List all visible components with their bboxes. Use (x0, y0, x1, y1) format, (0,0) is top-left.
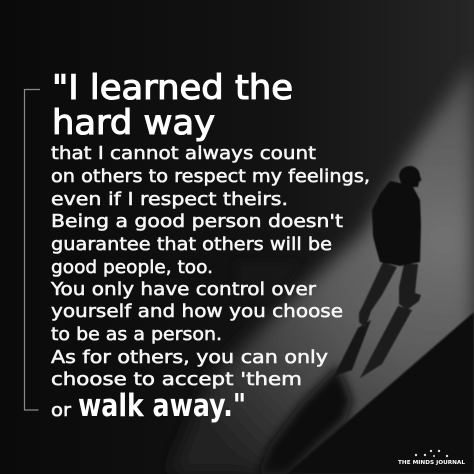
logo: The Minds Journal (398, 450, 466, 466)
coat (372, 181, 421, 266)
walking person silhouette (334, 166, 422, 378)
logo text: THE MINDS JOURNAL (398, 460, 466, 466)
emphasis: walk away: walk away." (78, 388, 246, 424)
dark streak behind text (237, 262, 300, 300)
quote bracket (24, 90, 40, 410)
head (399, 166, 422, 187)
body lines: that I cannot always count (51, 143, 316, 164)
quote text: You only have control over (50, 279, 317, 300)
quote text: even if I respect theirs. (51, 189, 288, 210)
quote text: on others to respect my feelings, (51, 166, 370, 187)
quote text: or (51, 400, 72, 421)
quote text: Being a good person doesn't (51, 211, 343, 232)
right leg and foot (399, 264, 421, 310)
broad shadow cast on ground (258, 366, 352, 474)
quote text: hard way (52, 103, 215, 142)
light beam (170, 60, 474, 474)
quote text: As for others, you can only (51, 347, 328, 368)
quote text: choose to accept 'them (51, 369, 302, 390)
quote text (50, 68, 370, 424)
quote text: yourself and how you choose (51, 301, 343, 322)
heading: "I learned the (52, 68, 293, 107)
quote text: guarantee that others will be (51, 234, 332, 255)
dark wedge lower right (287, 312, 474, 474)
left leg and foot (359, 262, 397, 328)
quote text: to be as a person. (51, 324, 222, 345)
shadow of right foot (360, 306, 412, 378)
quote text: good people, too. (51, 257, 213, 278)
shadow of left foot (334, 320, 371, 376)
logo stars (415, 450, 448, 457)
